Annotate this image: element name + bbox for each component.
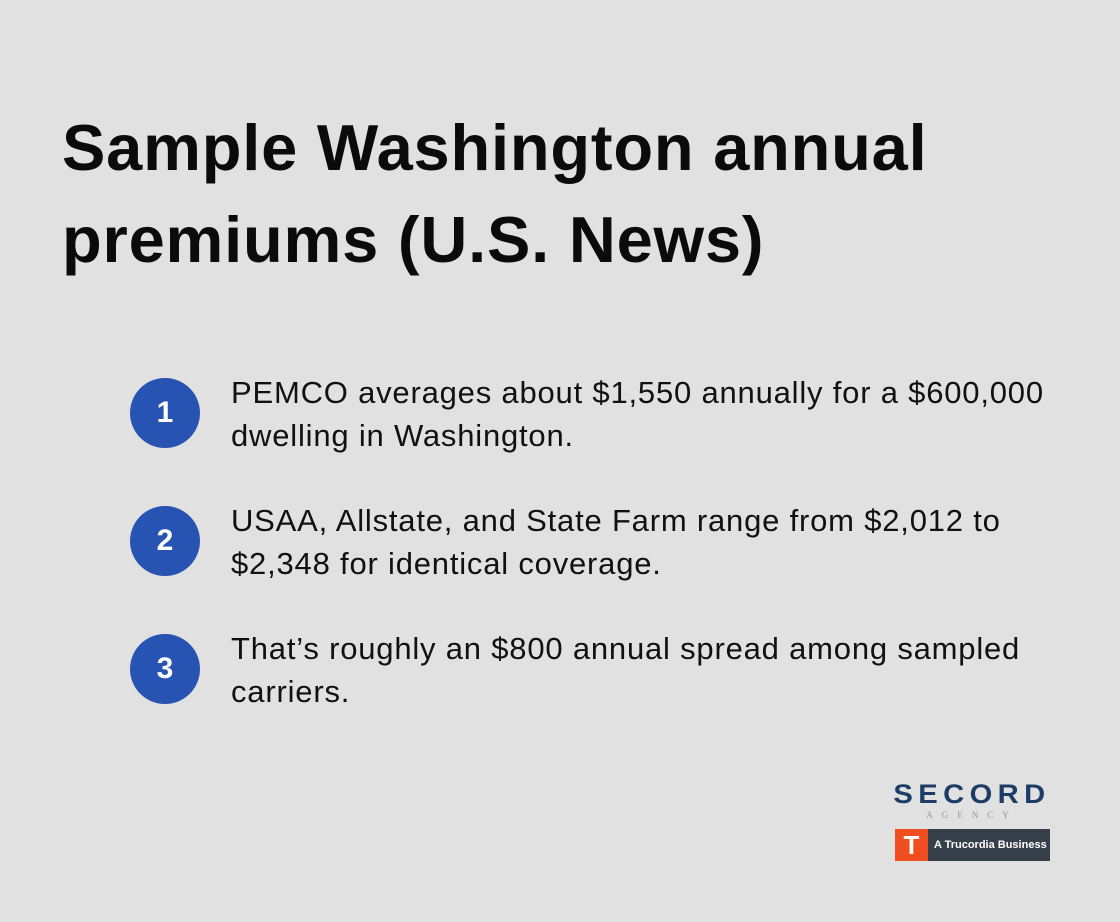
title: premiums (U.S. News) — [62, 203, 764, 276]
badge 2: 2 — [157, 524, 173, 557]
text 1 — [231, 375, 1044, 453]
agency subtitle: AGENCY — [926, 810, 1018, 820]
text 1: dwelling in Washington. — [231, 418, 574, 453]
badge 3: 3 — [157, 652, 173, 685]
trucordia badge: A Trucordia Business — [934, 839, 1047, 851]
item 1 — [130, 375, 1044, 453]
title — [62, 111, 927, 276]
text 3: That’s roughly an $800 annual spread among sampled — [231, 631, 1020, 666]
trucordia badge — [895, 829, 1050, 861]
text 3 — [231, 631, 1020, 709]
badge 3 — [130, 634, 200, 704]
badge 1 — [130, 378, 200, 448]
trucordia badge: T — [904, 830, 919, 860]
badge 2 — [130, 506, 200, 576]
title: Sample Washington annual — [62, 111, 927, 184]
logo — [893, 779, 1051, 861]
item 2 — [130, 503, 1001, 581]
item 3 — [130, 631, 1020, 709]
text 2 — [231, 503, 1001, 581]
badge 1: 1 — [157, 396, 173, 429]
text 3: carriers. — [231, 674, 350, 709]
text 2: $2,348 for identical coverage. — [231, 546, 662, 581]
text 1: PEMCO averages about $1,550 annually for a $600,000 — [231, 375, 1044, 410]
text 2: USAA, Allstate, and State Farm range from $2,012 to — [231, 503, 1001, 538]
logo wordmark: SECORD — [893, 779, 1051, 809]
